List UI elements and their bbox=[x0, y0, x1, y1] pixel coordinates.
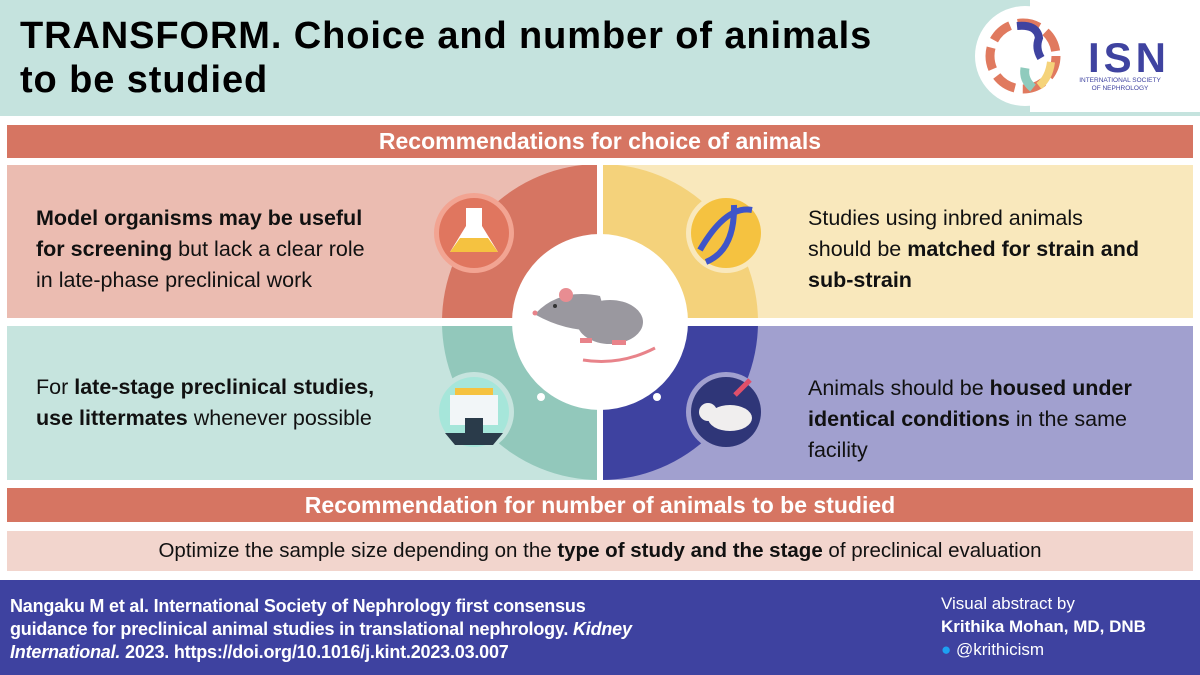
text: housing: facility bbox=[808, 438, 868, 462]
citation: International. 2023. https://doi.org/10.1016/j.kint.2023.03.007 bbox=[10, 642, 509, 662]
text: model organisms bbox=[36, 206, 365, 292]
citation bbox=[10, 596, 633, 662]
text: inbred animals: sub-strain bbox=[808, 268, 912, 292]
text: littermates bbox=[36, 375, 374, 430]
credit: Krithika Mohan, MD, DNB bbox=[941, 617, 1146, 636]
text: model organisms: for screening but lack a clear role bbox=[36, 237, 365, 261]
banner: number of animals: Recommendation for number of animals to be studied bbox=[305, 492, 895, 518]
text: model organisms: in late-phase preclinical work bbox=[36, 268, 312, 292]
credit bbox=[941, 594, 1146, 659]
text: housing bbox=[808, 376, 1132, 462]
header background bbox=[0, 0, 1200, 116]
ring arcs bbox=[442, 164, 758, 480]
logo: ISN: ISN bbox=[1088, 34, 1166, 81]
banner: choice of animals bbox=[7, 125, 1193, 158]
icon: flask bbox=[434, 193, 514, 273]
dots bbox=[537, 393, 661, 401]
logo: ISN bbox=[975, 0, 1200, 112]
center circle with rat bbox=[512, 234, 688, 410]
icon: DNA bbox=[686, 193, 766, 273]
text: inbred animals bbox=[808, 206, 1139, 292]
icon: lab mouse bbox=[686, 372, 766, 452]
icon: building bbox=[434, 372, 514, 452]
credit: Visual abstract by bbox=[941, 594, 1075, 613]
logo: ISN: INTERNATIONAL SOCIETY bbox=[1079, 77, 1161, 84]
citation: guidance for preclinical animal studies in translational nephrology. Kidney bbox=[10, 619, 632, 639]
central graphic: four quadrants with ring and icons bbox=[7, 165, 1193, 480]
text: littermates: For late-stage preclinical studies, bbox=[36, 375, 374, 399]
footer bbox=[0, 580, 1200, 675]
text: littermates: use littermates whenever possible bbox=[36, 406, 372, 430]
panel backgrounds bbox=[7, 165, 1193, 480]
title: TRANSFORM. Choice and number of animals bbox=[20, 15, 872, 57]
text: housing: identical conditions in the same bbox=[808, 407, 1127, 431]
text: housing: Animals should be housed under bbox=[808, 376, 1132, 400]
title: to be studied bbox=[20, 59, 268, 101]
banner: number of animals bbox=[7, 488, 1193, 522]
text: model organisms: Model organisms may be useful bbox=[36, 206, 362, 230]
text: inbred animals: should be matched for strain and bbox=[808, 237, 1139, 261]
citation: Nangaku M et al. International Society of Nephrology first consensus bbox=[10, 596, 586, 616]
title bbox=[20, 15, 872, 101]
text: inbred animals: Studies using inbred animals bbox=[808, 206, 1083, 230]
text: sample size bbox=[7, 531, 1193, 571]
text: sample size: Optimize the sample size depending on the type of study and the stage of preclinical evaluation bbox=[158, 539, 1042, 562]
logo: ISN: OF NEPHROLOGY bbox=[1092, 85, 1149, 92]
credit: ● @krithicism bbox=[941, 640, 1044, 659]
banner: choice of animals: Recommendations for choice of animals bbox=[379, 128, 821, 154]
